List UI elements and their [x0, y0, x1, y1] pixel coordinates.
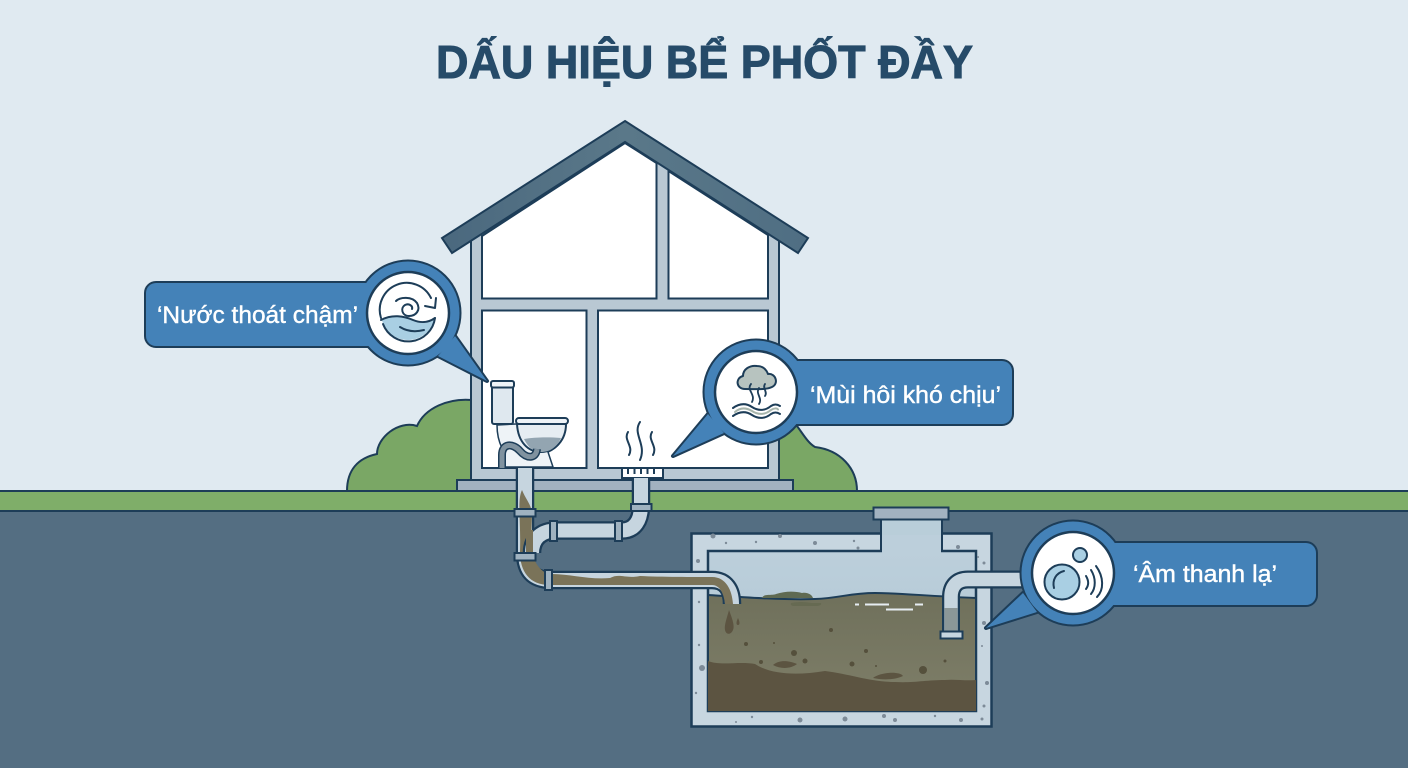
callout: slow drain [146, 262, 487, 381]
dark particles [744, 628, 946, 674]
outlet pipe [940, 580, 1030, 638]
sludge clumps [773, 661, 903, 679]
scum under surface [791, 602, 821, 606]
callout outline [986, 522, 1316, 628]
outlet pipe fill [951, 580, 1030, 633]
concrete speckles [695, 534, 989, 723]
grate ticks [628, 469, 654, 474]
bowl water [524, 437, 561, 452]
room: bathroom [482, 310, 586, 468]
icon: bubbles and sound waves [1044, 548, 1102, 600]
surface scum [762, 592, 813, 598]
room: right [598, 310, 768, 468]
outlet collar [940, 632, 962, 638]
sludge at branch junction [526, 530, 533, 552]
falling sludge drops [725, 610, 740, 634]
toilet [491, 381, 568, 468]
roof [442, 121, 808, 253]
window: upper left [482, 143, 656, 298]
tank inner chamber [708, 551, 976, 711]
pipe: toilet stack and main line fill [525, 468, 732, 604]
callout icon disc [367, 272, 449, 354]
callout outline [146, 262, 487, 381]
pipe collars [514, 504, 652, 590]
title: DẤU HIỆU BỂ PHỐT ĐẦY [436, 36, 973, 88]
underground soil [0, 511, 1408, 768]
callout label: ‘Nước thoát chậm’ [157, 302, 358, 329]
callout icon disc [1032, 532, 1114, 614]
icon: smell cloud and waves [733, 366, 780, 418]
sewage liquid [708, 592, 976, 711]
toilet base and bowl back [497, 424, 566, 467]
callout body [146, 262, 487, 381]
house wall frame [471, 130, 779, 481]
tank concrete shell [692, 534, 992, 726]
tank cap [874, 508, 948, 520]
pipe: vent branch fill [532, 478, 641, 553]
bush: left [347, 400, 472, 491]
window: upper right [668, 171, 768, 298]
callout: bad smell [673, 340, 1012, 456]
sludge in stack [519, 490, 733, 604]
septic tank [692, 508, 992, 726]
toilet rim [516, 418, 568, 424]
drain pipes [519, 468, 733, 604]
bottom sludge [708, 661, 976, 711]
callout: strange sound [986, 522, 1316, 628]
toilet trap pipe [502, 445, 537, 468]
toilet trap pipe fill [502, 445, 537, 468]
callout body [673, 340, 1012, 456]
surface glints [855, 604, 923, 610]
toilet tank [492, 386, 513, 424]
vent grate [622, 468, 663, 478]
tank neck [881, 519, 942, 551]
house [442, 121, 808, 491]
sky background [0, 0, 1408, 492]
callout label: ‘Âm thanh lạ’ [1133, 561, 1277, 588]
liquid body [709, 592, 975, 682]
callout body [986, 522, 1316, 628]
grass strip [0, 491, 1408, 511]
steam lines [627, 422, 654, 460]
pipe: toilet stack and main line outline [525, 468, 732, 604]
toilet tank lid [491, 381, 514, 388]
toilet bowl [517, 424, 566, 452]
icon: swirl and water [380, 283, 436, 345]
neck opening [882, 535, 941, 553]
pipe: vent branch outline [532, 478, 641, 553]
foundation slab [457, 480, 793, 491]
callout outline [673, 340, 1012, 456]
callout icon disc [715, 351, 797, 433]
callout label: ‘Mùi hôi khó chịu’ [810, 382, 1001, 409]
outlet pipe outline [951, 580, 1030, 633]
liquid inside outlet pipe [944, 608, 958, 632]
floor vent with odor [622, 422, 663, 478]
bush: right [778, 420, 857, 491]
